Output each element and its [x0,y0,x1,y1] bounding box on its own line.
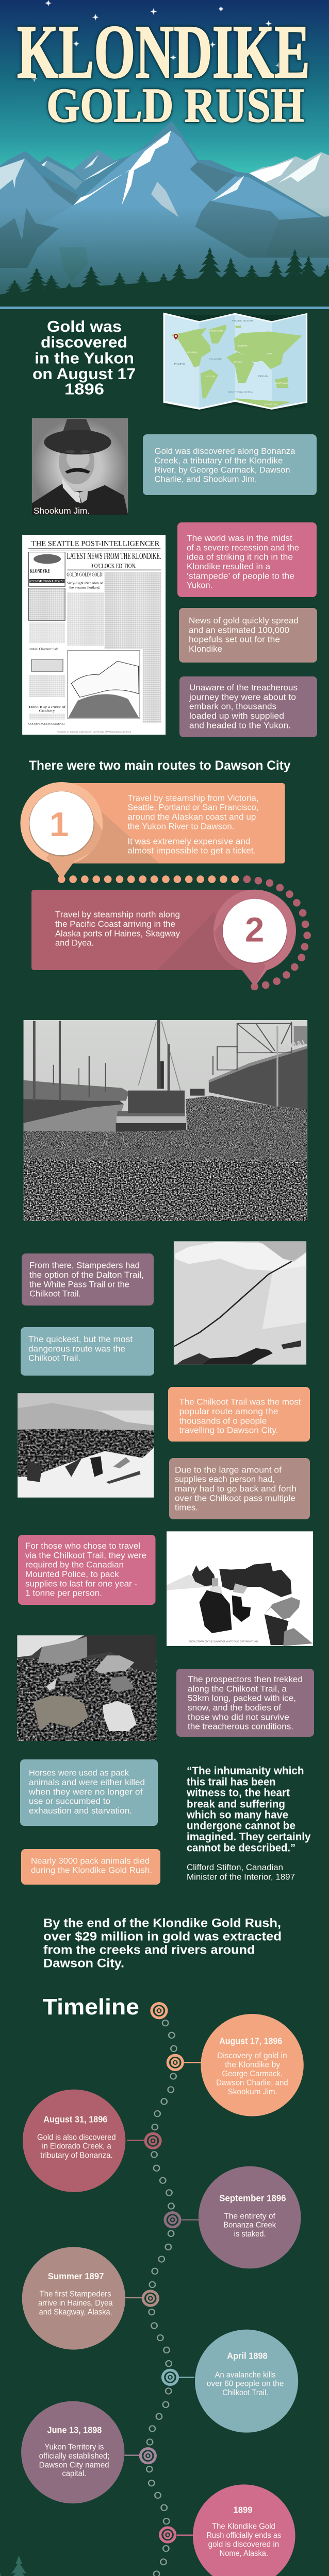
photo: Seattle newspaper front page: Don't Buy a Piece of [29,705,66,709]
route 1 text: Seattle, Portland or San Francisco, [127,803,258,812]
text box: quickest route [21,1327,154,1376]
text box: horses as pack animals: use or succumbed to [29,1797,110,1806]
lower mountain shading [0,206,329,304]
text box: news spread: News of gold quickly spread [189,616,299,625]
photo: Shookum Jim: Shookum Jim. [34,506,90,516]
text box: severe recession: Yukon. [187,581,212,590]
timeline event: April 1898: April 1898 [227,2351,268,2361]
photo: Seattle newspaper front page: Crockery [39,708,55,713]
photo: Seattle newspaper front page: THE SEATTLE POST-INTELLIGENCER [31,539,159,548]
text box: quickest route: dangerous route was the [28,1344,125,1353]
text box: large amount of supplies: times. [175,1503,198,1513]
world map with location pin: ANTARCTICA [265,403,277,405]
header scene: sky, stars and mountains [0,0,329,309]
photo: Seattle newspaper front page: GOLD! GOLD! GOLD! [67,572,104,578]
text box: news spread: Klondike [189,644,222,654]
timeline event: Summer 1897: and Skagway, Alaska. [39,2307,112,2316]
mountain range [0,121,329,309]
world map with location pin [163,313,307,411]
photo: line of climbers on snow slope [174,1241,306,1365]
heading: gold was discovered: on August 17 [32,365,136,383]
text box: the treacherous trek: those who did not survive [188,1712,289,1722]
text box: the treacherous trek: the treacherous conditions. [188,1722,293,1732]
text box: unaware of the journey: loaded up with supplied [189,711,284,721]
text box: the treacherous trek: 53km long, packed with ice, [188,1693,296,1703]
photo: Seattle newspaper front page: Sixty-Eight Rich Men on [67,581,104,585]
photo: Shookum Jim [32,418,128,516]
text box: most popular route [168,1387,310,1442]
timeline event: 1899: Rush officially ends as [206,2531,281,2540]
text box: large amount of supplies: many had to go back and forth [175,1484,297,1494]
panel: route 1 [20,782,285,879]
statement: $29 million in gold: from the creeks and rivers around [43,1943,255,1957]
text box: severe recession: The world was in the midst [187,533,292,543]
photo: Seattle newspaper front page: 9 O'CLOCK EDITION. [91,563,136,570]
text: LATEST NEWS FROM THE KLONDIKE. [67,551,161,561]
timeline event: Summer 1897: Summer 1897 [48,2272,104,2281]
timeline event: August 17, 1896: Discovery of gold in [217,2051,287,2060]
timeline event: August 31, 1896: Gold is also discovered [37,2132,116,2142]
text box: where gold was discovered: Gold was discovered along Bonanza [155,446,295,456]
world map with location pin: NORTH AMERICA [187,351,197,353]
title: GOLD RUSH [46,79,304,132]
title [17,10,310,132]
text box: news spread: hopefuls set out for the [189,635,280,645]
timeline event: April 1898: An avalanche kills [215,2370,276,2379]
statement: $29 million in gold: Dawson City. [43,1957,124,1971]
text box: most popular route: thousands of o people [179,1416,267,1426]
route 1 text: Travel by steamship from Victoria, [127,793,258,803]
route 1 pin [20,782,103,879]
quote: Clifford Sifton: Minister of the Interior, 1897 [187,1872,295,1882]
text box: horses as pack animals: exhaustion and starvation. [29,1806,132,1816]
icon: map pin [174,334,178,340]
quote: Clifford Sifton: imagined. They certainly [187,1831,311,1843]
world map with location pin: AUSTRALIA [275,382,289,384]
route 1 banner [61,783,285,863]
timeline event: September 1896: The entirety of [224,2211,275,2221]
timeline event: June 13, 1898: June 13, 1898 [47,2425,102,2435]
route 1 text [127,793,258,856]
world map with location pin: AFRICA [234,361,242,363]
route 2 text: the Pacific Coast arriving in the [55,919,175,929]
text box: quickest route: The quickest, but the most [28,1334,133,1344]
heading: gold was discovered: Gold was [47,317,122,335]
text box: trail options: the White Pass Trail or the [29,1279,129,1289]
photo: Seattle newspaper front page: COOPER&LEVY [30,579,64,583]
text box: one year of supplies [18,1535,156,1605]
heading: gold was discovered: discovered [41,333,127,351]
text box: news spread [179,608,317,663]
timeline event: September 1896: September 1896 [219,2193,286,2204]
photo: Seattle newspaper front page: Annual Clearance Sale [29,647,58,651]
text box: the treacherous trek: along the Chilkoot Trail, a [188,1684,287,1693]
timeline event: June 13, 1898: capital. [62,2469,86,2478]
route 1 text: almost impossible to get a ticket. [127,846,256,856]
timeline dotted path [146,2020,177,2576]
quote: Clifford Sifton: Clifford Stifton, Canadian [187,1862,283,1872]
panel: route 2 [31,890,296,987]
text box: horses as pack animals [20,1759,158,1826]
route 2 text: Alaska ports of Haines, Skagway [55,928,180,938]
text box: severe recession: ‘stampede’ of people to the [187,571,294,581]
route 1 text: the Yukon River to Dawson. [127,821,234,831]
route 1 text: It was extremely expensive and [127,836,250,846]
text box: most popular route: travelling to Dawson City. [179,1426,278,1435]
timeline event: June 13, 1898: Yukon Territory is [44,2442,104,2451]
text box: unaware of the journey: journey they were about to [189,692,296,702]
route 2 banner [31,890,255,970]
timeline event: August 31, 1896 [23,2090,162,2192]
text box: trail options: From there, Stampeders had [29,1261,140,1270]
timeline event: 1899: Nome, Alaska. [220,2549,268,2558]
timeline event: 1899: 1899 [233,2505,253,2515]
text box: pack animals died: during the Klondike Gold Rush. [31,1865,152,1875]
timeline start node [150,2002,168,2019]
timeline event: August 17, 1896: Dawson Charlie, and [216,2078,288,2087]
newspaper map [68,651,140,719]
timeline event: June 13, 1898 [21,2401,157,2503]
text box: most popular route: The Chilkoot Trail was the most [179,1397,301,1407]
text box: quickest route: Chilkoot Trail. [28,1353,80,1363]
photo: crowd at the wharf [24,1020,307,1221]
timeline event: 1899: gold is discovered in [208,2539,279,2549]
timeline event: September 1896: is staked. [234,2229,266,2239]
timeline heading: Timeline [43,1994,139,2020]
timeline event: August 17, 1896 [167,2014,304,2116]
world map with location pin: SOUTH [206,375,215,378]
quote: Clifford Sifton: “The inhumanity which [187,1765,304,1777]
text box: where gold was discovered [143,434,317,495]
world map with location pin: SOUTHERN OCEAN [228,391,254,394]
timeline event: 1899: The Klondike Gold [212,2521,275,2531]
text box: severe recession [177,522,317,597]
text box: most popular route: popular route among the [179,1406,278,1416]
route 2 pin [213,890,296,987]
route 1 pin: 1 [50,805,69,844]
timeline event: September 1896 [163,2166,301,2268]
text box: one year of supplies: supplies to last for one year - [25,1579,137,1588]
route 2 text: and Dyea. [55,938,94,948]
text box: one year of supplies: For those who chose to travel [25,1541,140,1551]
text box: large amount of supplies: supplies each person had, [175,1475,275,1484]
text box: where gold was discovered: River, by George Carmack, Dawson [155,465,290,475]
route 2 text: Travel by steamship north along [55,910,180,920]
photo: Seattle newspaper front page [22,535,166,735]
photo: snowbound camp [18,1393,154,1498]
timeline event: Summer 1897: arrive in Haines, Dyea [38,2298,113,2308]
timeline event: August 17, 1896: the Klondike by [225,2060,280,2069]
text box: where gold was discovered: Charlie, and Shookum Jim. [155,474,257,484]
text box: one year of supplies: Mounted Police, to pack [25,1569,119,1579]
world map with location pin: ARCTIC OCEAN [232,319,253,323]
timeline event: Summer 1897 [22,2247,159,2350]
world map with location pin: ASIA [267,352,272,354]
footer landscape scene [0,2555,329,2576]
timeline event: April 1898: over 60 people on the [207,2379,284,2388]
forest layer [0,2555,329,2576]
stars [31,0,282,82]
text box: trail options: Chilkoot Trail. [29,1289,81,1299]
quote: Clifford Sifton: undergone cannot be [187,1820,295,1832]
text box: horses as pack animals: animals and were either killed [29,1777,145,1787]
photo: Seattle newspaper front page: GOLDEN RULE BAZAAR CO. [28,723,65,725]
heading: gold was discovered [32,317,136,398]
heading: two main routes: There were two main routes to Dawson City [29,758,291,773]
text box: severe recession: idea of striking it rich in the [187,552,293,562]
text box: unaware of the journey: and headed to the Yukon. [189,720,291,730]
quote: Clifford Sifton: this trail has been [187,1776,275,1788]
photo: snowstorm with sleds and horses: SNOW STORM ON THE SUMMIT OF WHITE PASS COPYRIGHT 1898 [189,1640,258,1643]
quote: Clifford Sifton [186,1765,311,1882]
route 1 long shadow [52,796,159,863]
text box: severe recession: Klondike resulted in a [187,562,271,571]
text box: horses as pack animals: Horses were used as pack [29,1768,129,1778]
text box: severe recession: of a severe recession and the [187,543,299,552]
photo: snowstorm with sleds and horses [167,1531,313,1646]
timeline event: April 1898 [161,2330,298,2433]
tree line silhouette [0,247,329,307]
timeline event: June 13, 1898: Dawson City named [39,2460,109,2469]
text box: where gold was discovered: Creek, a tributary of the Klondike [155,455,283,465]
text box: large amount of supplies: Due to the large amount of [175,1465,282,1475]
text box: one year of supplies: via the Chilkoot Trail, they were [25,1550,146,1560]
timeline event: August 31, 1896: August 31, 1896 [43,2114,107,2125]
quote: Clifford Sifton: break and suffering [187,1798,285,1810]
quote: Clifford Sifton: which so many have [186,1809,288,1821]
dotted path between routes [58,875,311,990]
text box: the treacherous trek: The prospectors then trekked [188,1674,303,1684]
timeline event: April 1898: Chilkoot Trail. [222,2388,268,2397]
world map with location pin: EUROPE [238,345,248,347]
quote: Clifford Sifton: witness to, the heart [186,1787,290,1799]
timeline event: August 17, 1896: Skookum Jim. [227,2087,277,2096]
text box: unaware of the journey [179,676,317,737]
statement: $29 million in gold: By the end of the Klondike Gold Rush, [43,1917,281,1930]
text box: one year of supplies: required by the Canadian [25,1560,124,1570]
text box: large amount of supplies: over the Chilkoot pass multiple [175,1493,295,1503]
world map with location pin: ATLANTIC [209,358,222,361]
text box: unaware of the journey: embark on, thousands [189,702,276,711]
timeline event: August 17, 1896: August 17, 1896 [219,2036,282,2046]
text box: trail options: the option of the Dalton Trail, [29,1270,144,1280]
photo: Seattle newspaper front page: KLONDYKE [30,568,50,574]
route 1 text: around the Alaskan coast and up [127,812,256,822]
route 2 long shadow [157,912,248,970]
route 2 pin: 2 [245,911,264,950]
timeline event: August 31, 1896: in Eldorado Creek, a [42,2141,111,2150]
heading: gold was discovered: 1896 [64,380,104,398]
text box: unaware of the journey: Unaware of the treacherous [189,683,298,692]
timeline event: September 1896: Bonanza Creek [223,2220,276,2229]
text box: news spread: and an estimated 100,000 [189,625,289,635]
text box: trail options [22,1253,154,1306]
photo: crowd at the wharf: NANAI [277,1038,306,1055]
text box: pack animals died [21,1849,160,1885]
timeline event: 1899 [159,2484,295,2576]
world map with location pin: PACIFIC [174,363,185,366]
text box: large amount of supplies [169,1458,310,1519]
text box: the treacherous trek [176,1669,314,1737]
photo: Seattle newspaper front page: Property of Special Collections, University of Washington Libraries [57,731,131,734]
text box: horses as pack animals: when they were no longer of [28,1787,143,1797]
text box: pack animals died: Nearly 3000 pack animals died [31,1856,150,1866]
night sky [0,0,329,206]
world map with location pin: GREENLAND [209,330,223,332]
text box: one year of supplies: 1 tonne per person. [25,1588,102,1598]
world map with location pin: INDIAN [258,375,269,378]
timeline event: June 13, 1898: officially established; [39,2451,109,2461]
timeline event: Summer 1897: The first Stampeders [39,2289,111,2298]
heading: gold was discovered: in the Yukon [35,349,134,367]
statement: $29 million in gold: over $29 million in gold was extracted [43,1930,282,1944]
quote: Clifford Sifton: cannot be described.” [187,1842,295,1854]
statement: $29 million in gold [43,1917,282,1971]
timeline event: August 31, 1896: tributary of Bonanza. [40,2150,113,2160]
photo: dead pack horses on the trail [17,1635,156,1741]
timeline event: August 17, 1896: George Carmack, [222,2069,283,2078]
route 2 text [55,910,180,948]
text box: the treacherous trek: snow, and the bodies of [188,1703,281,1713]
photo: Seattle newspaper front page: the Steamer Portland. [69,585,100,589]
